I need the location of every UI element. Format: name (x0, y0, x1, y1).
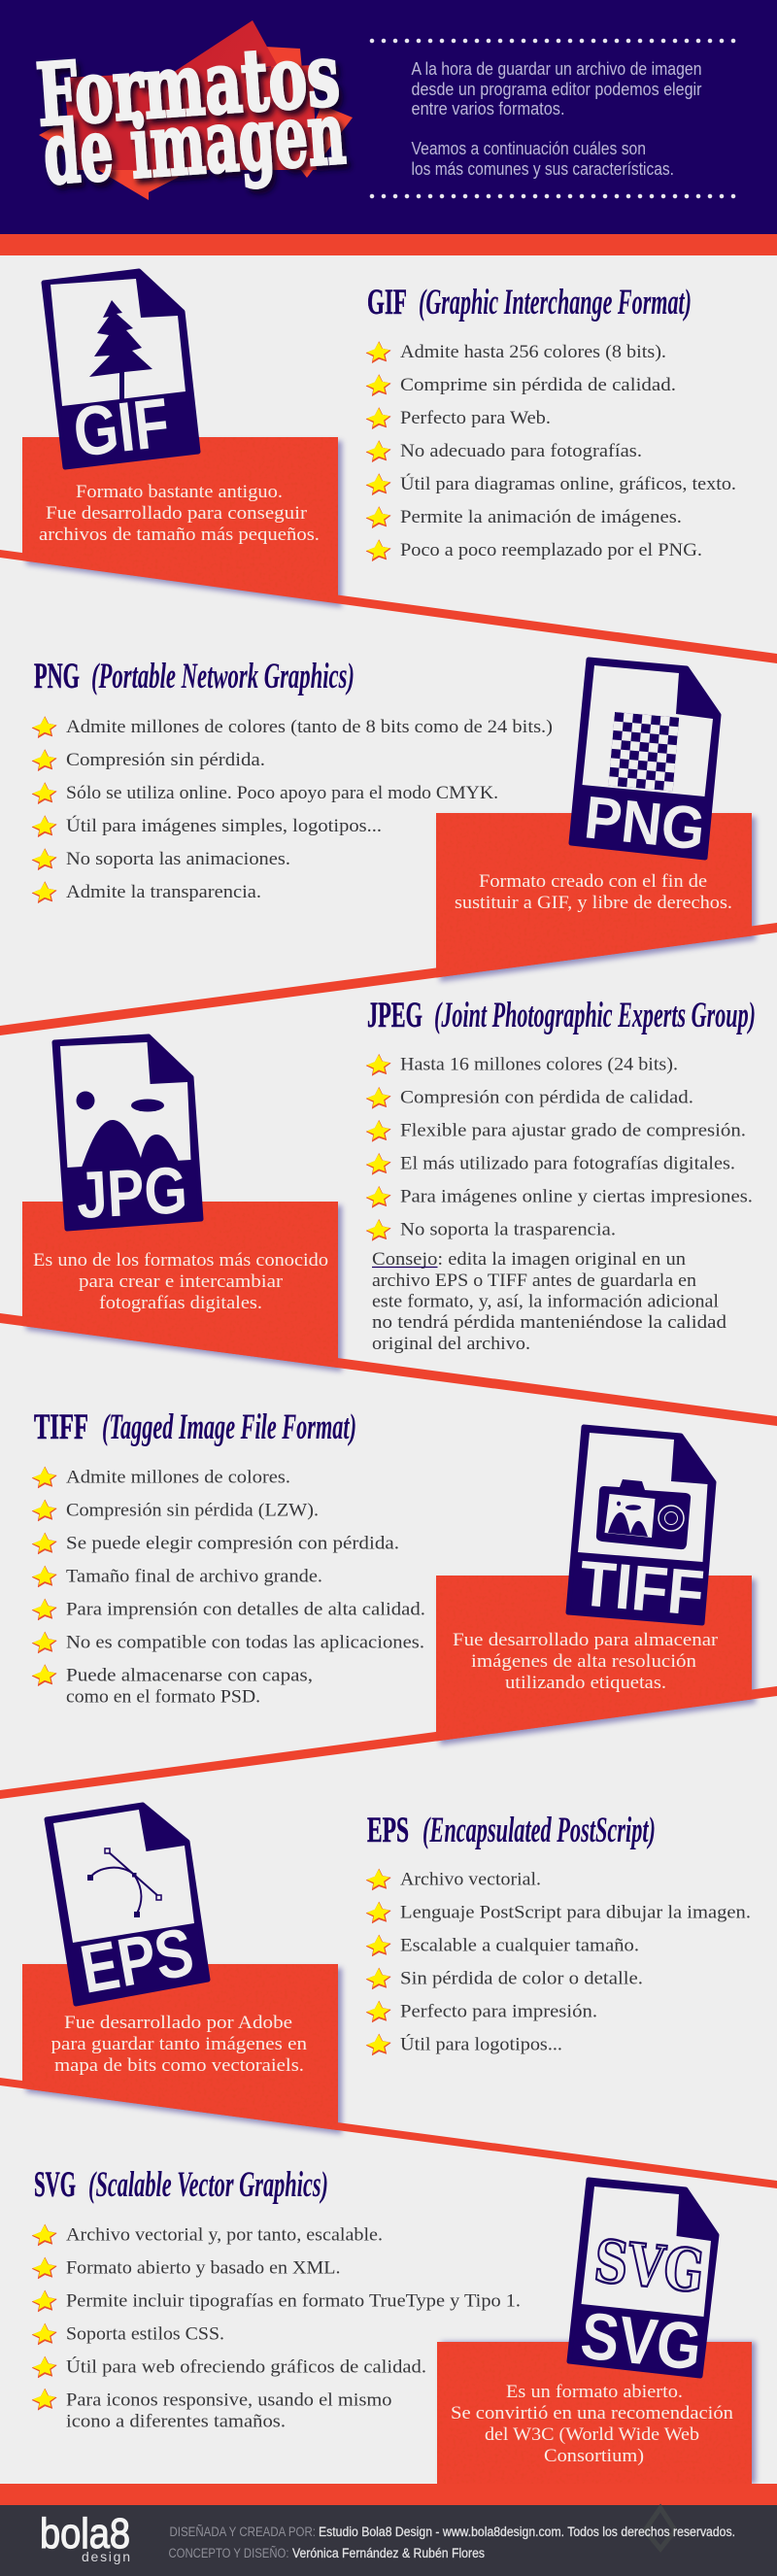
TIFF feature list: Puede almacenarse con capas, (66, 1665, 313, 1685)
title: Formatos (33, 23, 343, 146)
SVG box text: Consortium) (544, 2446, 644, 2466)
intro text: desde un programa editor podemos elegir (412, 80, 701, 99)
GIF feature list: Poco a poco reemplazado por el PNG. (400, 540, 702, 560)
icon: SVG file with outlined letters: SVG (577, 2298, 705, 2385)
EPS heading: EPS (367, 1811, 409, 1850)
SVG box text: Se convirtió en una recomendación (451, 2403, 734, 2423)
PNG feature list: Admite millones de colores (tanto de 8 bits como de 24 bits.) (66, 717, 553, 737)
SVG box text: del W3C (World Wide Web (485, 2424, 699, 2445)
GIF feature list: No adecuado para fotografías. (400, 441, 642, 461)
SVG heading (34, 2165, 328, 2205)
GIF heading (367, 283, 692, 322)
EPS feature list (366, 1869, 751, 2055)
PNG heading: (Portable Network Graphics) (91, 657, 355, 696)
EPS feature list: Archivo vectorial. (400, 1869, 541, 1889)
intro text: los más comunes y sus características. (412, 159, 674, 179)
SVG heading: (Scalable Vector Graphics) (88, 2165, 328, 2205)
icon: GIF file with tree: GIF (70, 384, 173, 472)
PNG feature list: Compresión sin pérdida. (66, 750, 265, 770)
intro text: entre varios formatos. (412, 99, 565, 119)
EPS feature list: Perfecto para impresión. (400, 2001, 597, 2021)
SVG red box (437, 2342, 752, 2484)
GIF box text: archivos de tamaño más pequeños. (39, 525, 320, 545)
icon: PNG file with checkerboard (571, 660, 719, 864)
icon: JPG file with landscape: JPG (75, 1153, 189, 1233)
JPEG tip note (372, 1249, 727, 1354)
logo: bola8 design: bola8 (40, 2510, 130, 2558)
SVG feature list: Útil para web ofreciendo gráficos de calidad. (66, 2356, 426, 2377)
EPS box text (51, 2013, 308, 2076)
SVG feature list (32, 2224, 521, 2431)
JPEG feature list (366, 1055, 753, 1240)
TIFF feature list: Tamaño final de archivo grande. (66, 1566, 322, 1586)
TIFF feature list (32, 1467, 425, 1707)
TIFF feature list: Compresión sin pérdida (LZW). (66, 1500, 319, 1520)
JPEG feature list: Hasta 16 millones colores (24 bits). (400, 1055, 678, 1075)
TIFF heading (34, 1407, 356, 1447)
footer credits: Estudio Bola8 Design - www.bola8design.com. Todos los derechos reservados. (319, 2525, 735, 2539)
JPEG tip note: no tendrá pérdida manteniéndose la calidad (372, 1312, 727, 1333)
EPS box text: Fue desarrollado por Adobe (64, 2013, 292, 2033)
PNG feature list: No soporta las animaciones. (66, 849, 290, 869)
GIF feature list: Permite la animación de imágenes. (400, 507, 682, 527)
PNG feature list (32, 717, 553, 903)
footer credits: DISEÑADA Y CREADA POR: (169, 2525, 316, 2539)
EPS feature list: Escalable a cualquier tamaño. (400, 1935, 639, 1955)
EPS feature list: Sin pérdida de color o detalle. (400, 1968, 643, 1988)
GIF feature list: Admite hasta 256 colores (8 bits). (400, 342, 666, 362)
EPS heading (367, 1811, 656, 1850)
TIFF box text: imágenes de alta resolución (471, 1651, 697, 1672)
JPEG heading: JPEG (367, 996, 422, 1035)
PNG box text (455, 871, 732, 913)
icon: PNG file with checkerboard: PNG (582, 784, 708, 864)
GIF feature list: Perfecto para Web. (400, 408, 551, 428)
JPEG red box (22, 1202, 338, 1368)
icon: TIFF file with camera (568, 1427, 714, 1629)
panel: TIFF (0, 1407, 777, 1799)
JPEG feature list: No soporta la trasparencia. (400, 1220, 616, 1240)
JPEG feature list: Para imágenes online y ciertas impresiones. (400, 1187, 753, 1207)
GIF feature list: Útil para diagramas online, gráficos, texto. (400, 473, 736, 494)
SVG heading: SVG (34, 2165, 76, 2205)
JPEG box text: fotografías digitales. (99, 1293, 262, 1313)
panel: JPEG (0, 996, 777, 1426)
TIFF feature list: Para imprensión con detalles de alta calidad. (66, 1599, 425, 1619)
SVG box text: Es un formato abierto. (506, 2382, 683, 2402)
TIFF feature list: Admite millones de colores. (66, 1467, 290, 1487)
TIFF heading: TIFF (34, 1407, 88, 1447)
panel: PNG (0, 657, 777, 1035)
GIF box text: Fue desarrollado para conseguir (46, 503, 308, 524)
icon: SVG file with outlined letters (569, 2180, 717, 2385)
icon: TIFF file with camera: TIFF (577, 1546, 707, 1629)
JPEG box text: para crear e intercambiar (79, 1271, 284, 1292)
GIF red box (22, 437, 338, 603)
title (33, 23, 349, 204)
SVG feature list: Soporta estilos CSS. (66, 2323, 224, 2344)
header panel (0, 0, 777, 255)
PNG feature list: Admite la transparencia. (66, 882, 261, 902)
TIFF box text: Fue desarrollado para almacenar (453, 1630, 719, 1650)
JPEG tip note: este formato, y, así, la información adicional (372, 1292, 719, 1311)
icon: EPS file with bezier curve (47, 1805, 208, 2008)
PNG feature list: Sólo se utiliza online. Poco apoyo para el modo CMYK. (66, 783, 498, 803)
title: de imagen (40, 83, 349, 204)
SVG feature list: icono a diferentes tamaños. (66, 2411, 286, 2431)
PNG heading: PNG (34, 657, 80, 696)
intro text: A la hora de guardar un archivo de imagen (412, 59, 701, 79)
EPS feature list: Útil para logotipos... (400, 2033, 562, 2054)
GIF feature list: Comprime sin pérdida de calidad. (400, 375, 676, 395)
JPEG feature list: Compresión con pérdida de calidad. (400, 1088, 693, 1108)
TIFF feature list: Se puede elegir compresión con pérdida. (66, 1533, 399, 1553)
TIFF box text: utilizando etiquetas. (505, 1673, 666, 1693)
PNG box text: sustituir a GIF, y libre de derechos. (455, 893, 732, 913)
panel: SVG (32, 2165, 756, 2484)
icon: GIF file with tree (44, 271, 198, 472)
icon: SVG file with outlined letters: SVG (591, 2227, 707, 2307)
GIF feature list (366, 342, 736, 561)
GIF box text: Formato bastante antiguo. (76, 482, 283, 502)
PNG heading (34, 657, 355, 696)
JPEG tip note: archivo EPS o TIFF antes de guardarla en (372, 1271, 697, 1291)
TIFF box text (453, 1630, 719, 1693)
intro text: Veamos a continuación cuáles son (412, 139, 646, 158)
GIF box text (39, 482, 320, 545)
JPEG box text: Es uno de los formatos más conocido (33, 1250, 328, 1271)
TIFF feature list: No es compatible con todas las aplicaciones. (66, 1632, 424, 1652)
EPS red box (22, 1964, 338, 2130)
EPS box text: para guardar tanto imágenes en (51, 2034, 308, 2054)
footer credits: Verónica Fernández & Rubén Flores (292, 2546, 485, 2560)
footer credits: CONCEPTO Y DISEÑO: (169, 2546, 289, 2560)
SVG box text (451, 2382, 734, 2466)
JPEG feature list: El más utilizado para fotografías digitales. (400, 1154, 735, 1174)
TIFF feature list: como en el formato PSD. (66, 1686, 260, 1707)
logo: bola8 design: design (82, 2549, 130, 2564)
TIFF red box (436, 1576, 752, 1741)
JPEG tip note: original del archivo. (372, 1334, 530, 1354)
intro text (412, 59, 701, 179)
SVG feature list: Formato abierto y basado en XML. (66, 2257, 340, 2278)
title burst shapes (39, 20, 353, 200)
PNG box text: Formato creado con el fin de (479, 871, 707, 892)
SVG feature list: Permite incluir tipografías en formato TrueType y Tipo 1. (66, 2290, 521, 2311)
TIFF heading: (Tagged Image File Format) (102, 1407, 356, 1447)
JPEG feature list: Flexible para ajustar grado de compresión. (400, 1121, 746, 1141)
header accent bar (0, 234, 777, 255)
icon: EPS file with bezier curve: EPS (75, 1914, 199, 2008)
PNG feature list: Útil para imágenes simples, logotipos... (66, 815, 382, 836)
footer credits (169, 2525, 735, 2560)
EPS box text: mapa de bits como vectoraiels. (54, 2055, 304, 2076)
PNG red box (436, 813, 752, 977)
SVG feature list: Archivo vectorial y, por tanto, escalable. (66, 2224, 383, 2245)
GIF heading: GIF (367, 283, 407, 322)
footer panel (0, 2484, 777, 2576)
panel: GIF (0, 271, 777, 663)
JPEG box text (33, 1250, 328, 1313)
JPEG tip note: Consejo: edita la imagen original en un (372, 1249, 687, 1270)
EPS feature list: Lenguaje PostScript para dibujar la imagen. (400, 1902, 751, 1922)
icon: JPG file with landscape (54, 1036, 201, 1233)
SVG feature list: Para iconos responsive, usando el mismo (66, 2390, 392, 2410)
panel: EPS (0, 1805, 777, 2188)
